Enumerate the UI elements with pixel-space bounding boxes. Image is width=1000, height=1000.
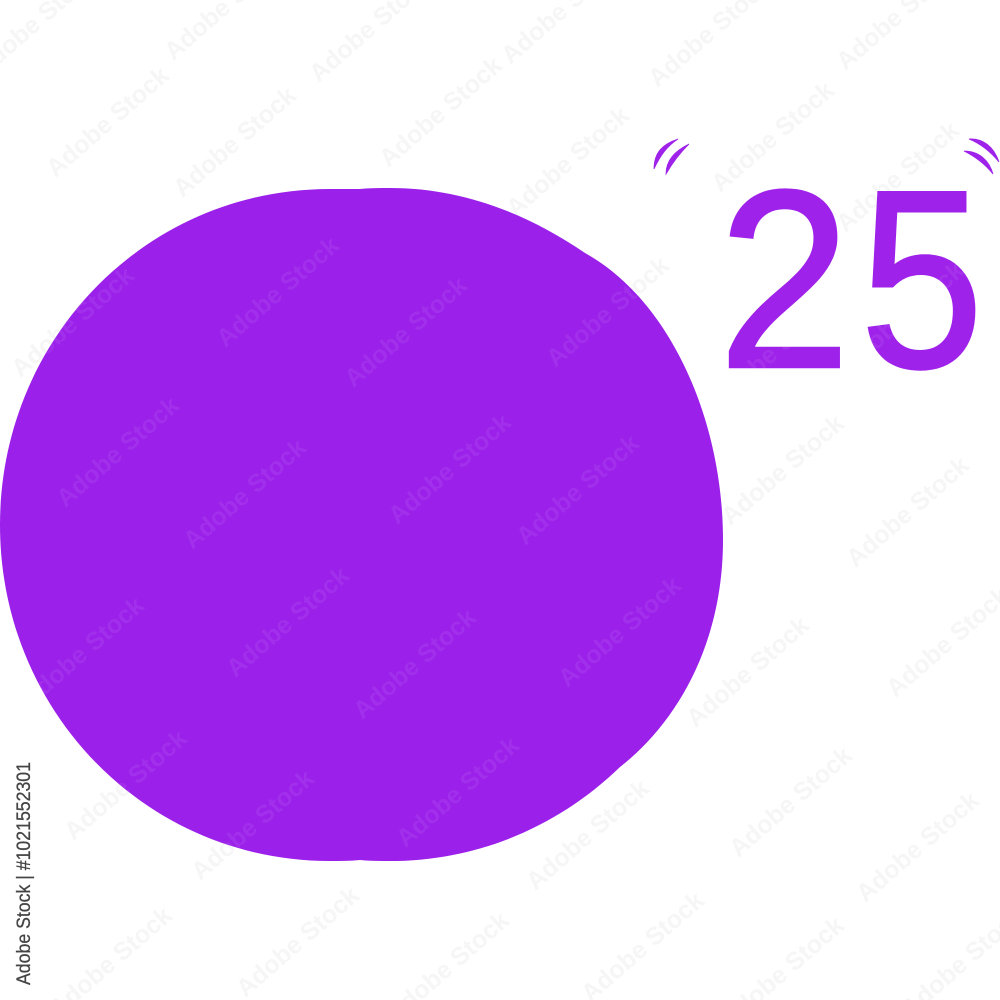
watermark pattern on white background: Adobe Stock (681, 611, 815, 733)
watermark pattern over the purple shapes: Adobe Stock (541, 251, 675, 373)
watermark pattern on white background: Adobe Stock (231, 881, 365, 1000)
watermark pattern on white background: Adobe Stock (851, 786, 985, 908)
watermark pattern over the purple shapes: Adobe Stock (186, 764, 320, 886)
stock id caption: Adobe Stock | #1021552301 (13, 762, 35, 985)
opening quote marks (654, 139, 689, 174)
number 25: 2 (718, 138, 851, 422)
watermark pattern on white background: Adobe Stock (541, 251, 675, 373)
watermark pattern over the purple shapes: Adobe Stock (51, 391, 185, 513)
watermark pattern on white background: Adobe Stock (716, 409, 850, 531)
large purple blob (0, 188, 723, 861)
number 25: 5 (860, 137, 984, 421)
watermark pattern over the purple shapes: Adobe Stock (511, 429, 645, 551)
watermark pattern on white background: Adobe Stock (59, 724, 193, 846)
watermark pattern over the purple shapes: Adobe Stock (553, 571, 687, 693)
watermark pattern on white background: Adobe Stock (168, 81, 302, 203)
watermark pattern over the purple shapes: Adobe Stock (221, 561, 355, 683)
watermark pattern over the purple shapes: Adobe Stock (6, 261, 140, 383)
watermark pattern over the purple shapes: Adobe Stock (348, 603, 482, 725)
number 25 (718, 137, 984, 422)
watermark pattern on white background: Adobe Stock (724, 741, 858, 863)
watermark pattern on white background: Adobe Stock (374, 51, 508, 173)
watermark pattern over the purple shapes: Adobe Stock (383, 408, 517, 530)
watermark pattern over the purple shapes: Adobe Stock (836, 256, 970, 378)
watermark pattern over the purple shapes (6, 231, 970, 886)
watermark pattern over the purple shapes: Adobe Stock (706, 291, 840, 413)
closing quote marks (964, 139, 999, 174)
watermark pattern over the purple shapes: Adobe Stock (178, 433, 312, 555)
watermark pattern over the purple shapes: Adobe Stock (16, 591, 150, 713)
watermark pattern over the purple shapes: Adobe Stock (59, 724, 193, 846)
watermark pattern on white background: Adobe Stock (521, 774, 655, 896)
watermark pattern on white background: Adobe Stock (41, 61, 175, 183)
watermark pattern on white background: Adobe Stock (6, 261, 140, 383)
watermark pattern over the purple shapes: Adobe Stock (339, 271, 473, 393)
watermark pattern on white background: Adobe Stock (831, 116, 965, 238)
watermark pattern on white background: Adobe Stock (501, 101, 635, 223)
watermark pattern on white background: Adobe Stock (841, 451, 975, 573)
watermark pattern over the purple shapes: Adobe Stock (211, 231, 345, 353)
watermark pattern on white background: Adobe Stock (186, 764, 320, 886)
watermark pattern on white background: Adobe Stock (706, 76, 840, 198)
watermark pattern over the purple shapes: Adobe Stock (391, 731, 525, 853)
